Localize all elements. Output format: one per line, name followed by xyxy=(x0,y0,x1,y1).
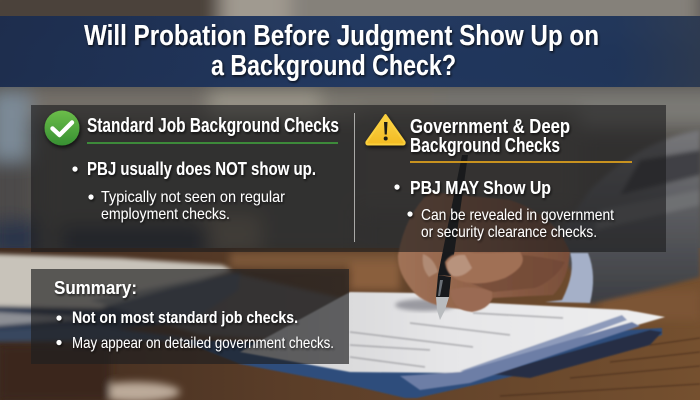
sub-bullet: regular employment checks xyxy=(88,189,286,223)
sub-bullet: regular employment checks: employment checks. xyxy=(101,206,230,223)
heading: government and deep checks: Government & Deep xyxy=(410,116,570,138)
icon: green check xyxy=(44,110,80,146)
title xyxy=(84,20,599,82)
blue folder xyxy=(180,328,662,398)
document text lines xyxy=(350,313,563,367)
white document xyxy=(240,292,665,390)
sub-bullet: government clearance checks: Can be revealed in government xyxy=(421,207,614,224)
summary heading: Summary: xyxy=(54,277,137,298)
table top xyxy=(0,248,700,400)
wood grain xyxy=(500,338,700,396)
sub-bullet: government clearance checks: or security clearance checks. xyxy=(421,224,597,241)
heading: standard job checks: Standard Job Background Checks xyxy=(87,115,339,137)
icon: warning triangle xyxy=(366,115,405,144)
heading: government and deep checks xyxy=(410,116,570,157)
blurred left document stack xyxy=(0,254,349,345)
panel: summary xyxy=(31,269,349,364)
bullet point: PBJ may show up: PBJ MAY Show Up xyxy=(410,177,551,198)
summary point: government checks: May appear on detailed government checks. xyxy=(72,335,334,352)
pen xyxy=(436,155,468,320)
suit sleeve xyxy=(555,130,700,304)
heading rule: amber xyxy=(410,161,632,163)
sub-bullet: regular employment checks: Typically not seen on regular xyxy=(101,189,286,206)
sub-bullet: government clearance checks xyxy=(407,207,614,241)
title band xyxy=(0,16,700,87)
thumb and fingers xyxy=(423,252,523,312)
hand xyxy=(398,192,570,310)
title: Will Probation Before Judgment Show Up on xyxy=(84,20,599,52)
heading: government and deep checks: Background Checks xyxy=(410,135,560,157)
paper shadow beneath hand xyxy=(395,299,455,311)
summary point: standard checks: Not on most standard job checks. xyxy=(72,308,298,327)
shirt cuff xyxy=(545,253,593,303)
heading rule: green xyxy=(87,142,338,144)
title: a Background Check? xyxy=(211,50,456,82)
panel: background check comparison xyxy=(31,105,666,252)
blurred office backdrop xyxy=(0,0,700,260)
divider xyxy=(354,113,355,242)
bullet point: PBJ usually does not show up: PBJ usually does NOT show up. xyxy=(87,158,316,179)
